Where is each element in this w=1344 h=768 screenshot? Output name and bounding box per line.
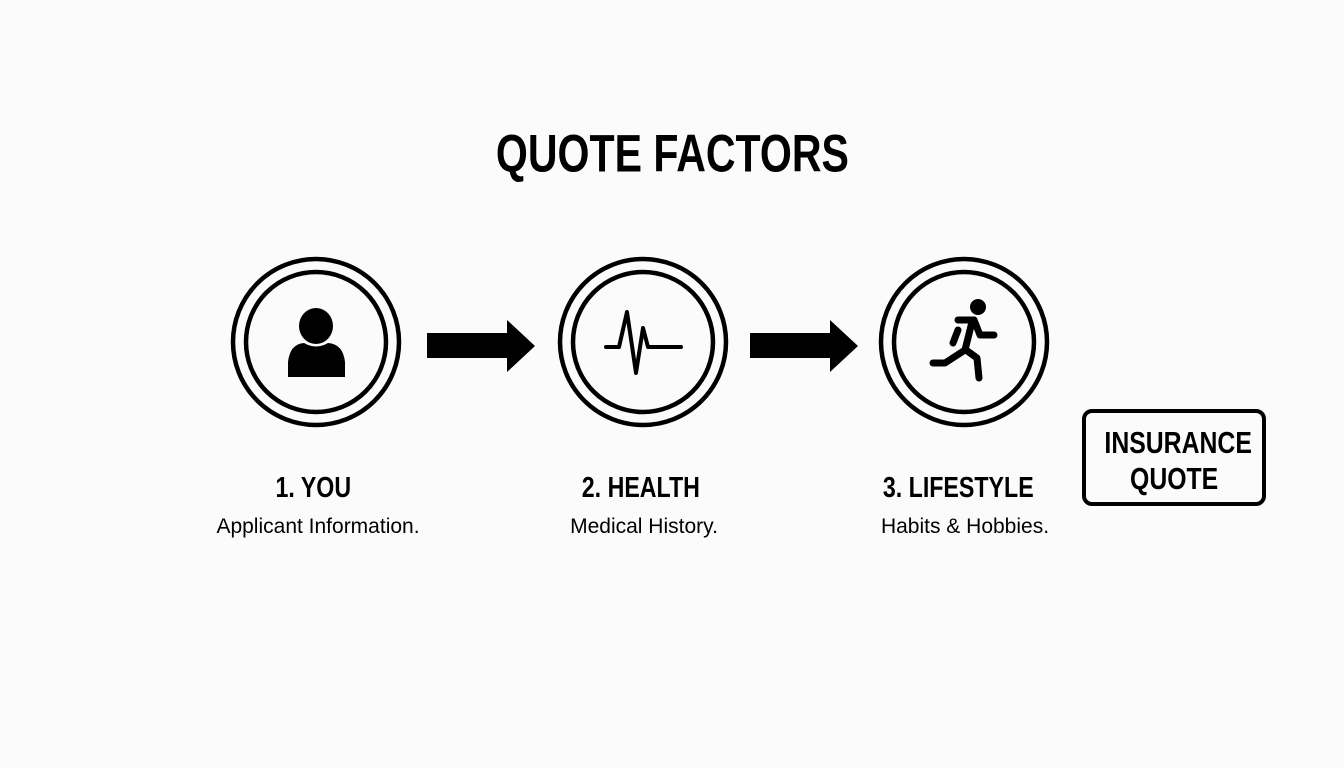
arrow 1 xyxy=(427,320,535,372)
label 3: 3. LIFESTYLE xyxy=(883,472,1033,504)
result box: INSURANCE xyxy=(1104,425,1252,460)
sub 2: Medical History. xyxy=(570,515,718,538)
title: QUOTE FACTORS xyxy=(495,124,849,184)
icon: person circle xyxy=(233,259,399,425)
sub 1: Applicant Information. xyxy=(216,515,420,538)
result box: QUOTE xyxy=(1130,461,1218,496)
icon: heartbeat circle xyxy=(560,259,726,425)
result box xyxy=(1082,409,1266,506)
sub 3: Habits & Hobbies. xyxy=(881,515,1049,538)
label 2: 2. HEALTH xyxy=(582,472,700,504)
icon: runner circle xyxy=(881,259,1047,425)
label 1: 1. YOU xyxy=(275,472,351,504)
arrow 2 xyxy=(750,320,858,372)
